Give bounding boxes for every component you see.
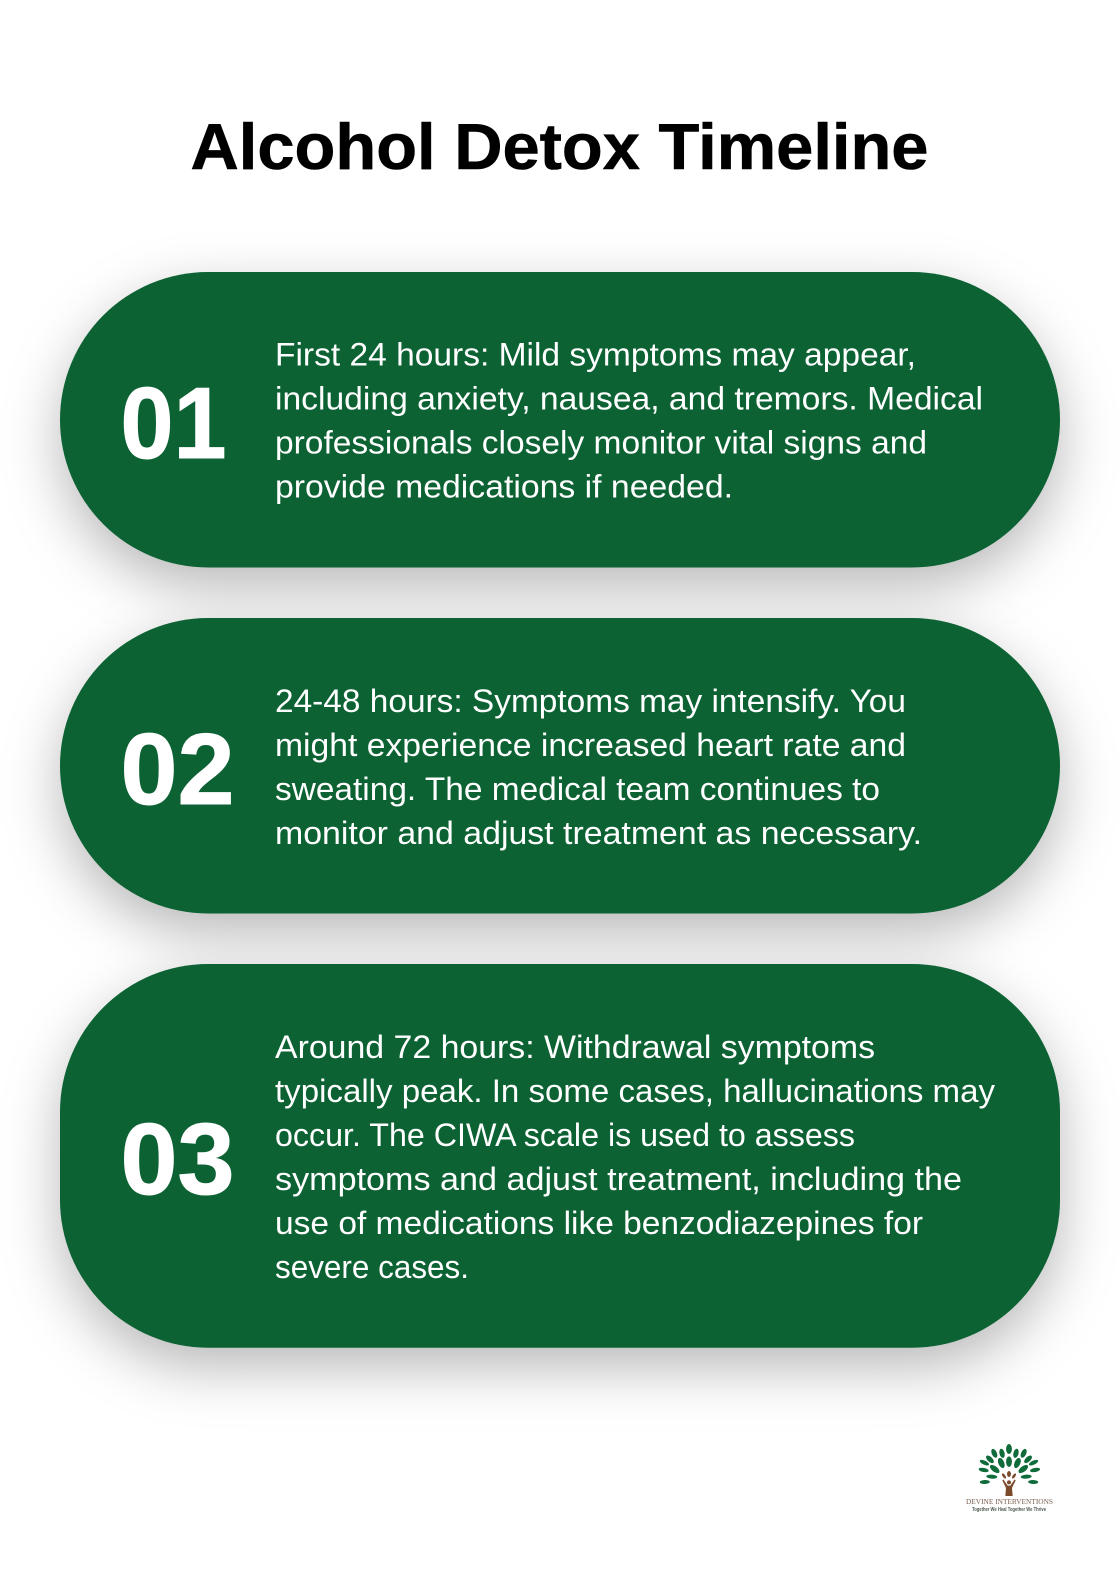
icon: tree <box>978 1444 1041 1496</box>
text block: first 24 hours: provide medications if needed. <box>275 468 733 504</box>
text block: around 72 hours: Around 72 hours: Withdrawal symptoms <box>275 1029 875 1065</box>
text block: around 72 hours: occur. The CIWA scale is used to assess <box>275 1117 855 1153</box>
step number 02: 02 <box>120 714 234 826</box>
text block: first 24 hours <box>275 336 983 504</box>
title: Alcohol Detox Timeline <box>190 110 928 183</box>
logo: Devine Interventions <box>966 1444 1053 1513</box>
panel: first 24 hours <box>60 272 1060 568</box>
text block: around 72 hours: severe cases. <box>275 1249 469 1285</box>
step number 03: 03 <box>120 1104 234 1216</box>
text block: first 24 hours: including anxiety, nausea, and tremors. Medical <box>275 380 983 416</box>
panel background 2 <box>60 618 1060 914</box>
text block: around 72 hours: use of medications like benzodiazepines for <box>275 1205 923 1241</box>
text block: 24-48 hours: might experience increased heart rate and <box>275 727 906 763</box>
text block: 24-48 hours: 24-48 hours: Symptoms may intensify. You <box>275 683 906 719</box>
text block: 24-48 hours: monitor and adjust treatment as necessary. <box>275 815 922 851</box>
text block: 24-48 hours: sweating. The medical team continues to <box>275 771 880 807</box>
text block: first 24 hours: professionals closely monitor vital signs and <box>275 424 927 460</box>
panel background 1 <box>60 272 1060 568</box>
text block: around 72 hours <box>275 1029 996 1285</box>
text block: 24-48 hours <box>275 683 922 851</box>
panel: 24-48 hours <box>60 618 1060 914</box>
panel background 3 <box>60 964 1060 1348</box>
text block: around 72 hours: typically peak. In some cases, hallucinations may <box>275 1073 996 1109</box>
logo name: DEVINE INTERVENTIONS <box>966 1497 1053 1506</box>
panel: around 72 hours <box>60 964 1060 1348</box>
text block: first 24 hours: First 24 hours: Mild symptoms may appear, <box>275 336 916 372</box>
logo tagline: Together We Heal Together We Thrive <box>972 1507 1046 1513</box>
text block: around 72 hours: symptoms and adjust treatment, including the <box>275 1161 962 1197</box>
step number 01: 01 <box>120 368 226 480</box>
